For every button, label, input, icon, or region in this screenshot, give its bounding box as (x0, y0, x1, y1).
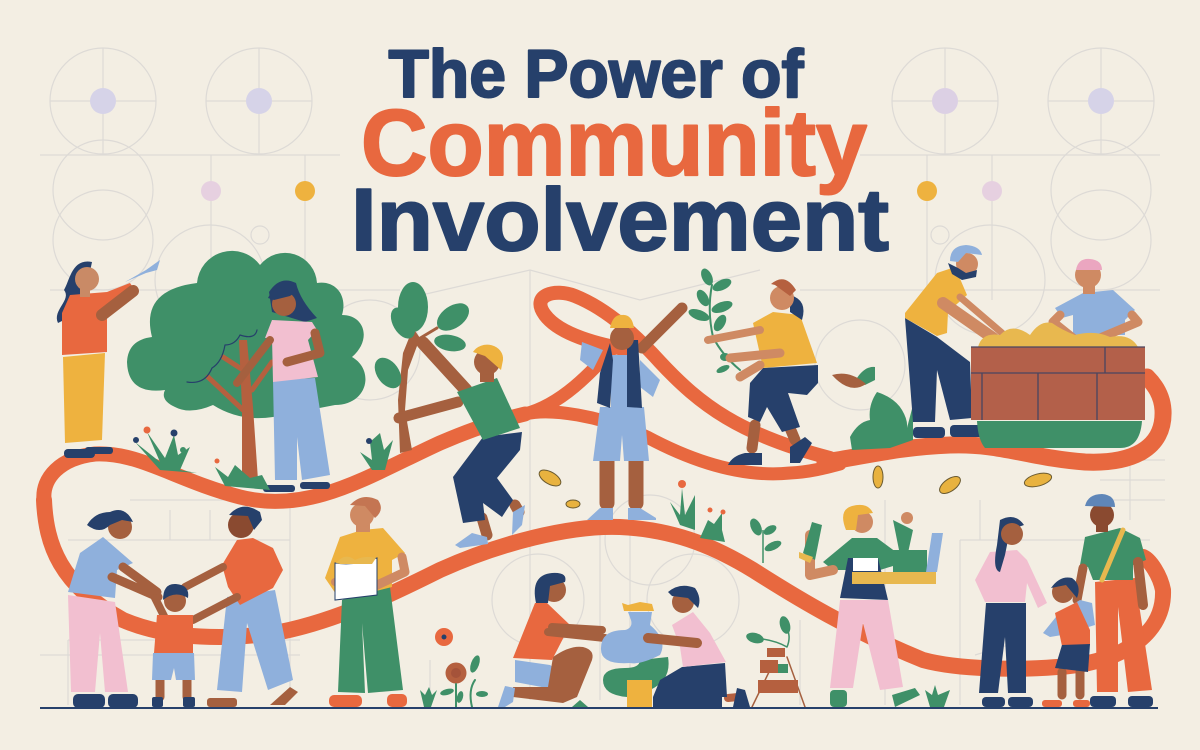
flowers and small plants (420, 628, 488, 707)
person: woman with brush on top left (57, 260, 160, 458)
winding orange ribbon (44, 293, 1163, 669)
person: woman in pink top (237, 280, 330, 492)
title (351, 36, 889, 269)
green bush (850, 392, 913, 450)
person: figure with paper (325, 497, 407, 707)
person: kneeling figure in orange (498, 573, 605, 707)
person: man in blue shirt (1053, 259, 1138, 338)
grass tuft (925, 685, 950, 707)
tree (127, 251, 365, 482)
title: The Power of (388, 36, 804, 112)
falling coins (537, 466, 1053, 508)
title: Involvement (351, 170, 889, 269)
person: man in green, family group (1077, 494, 1153, 707)
person: child, family group (1042, 577, 1095, 707)
person: vendor with tray (799, 505, 943, 707)
title: Community (361, 90, 867, 195)
sapling being planted (369, 282, 474, 453)
person: woman in orange top (185, 507, 298, 707)
decorative dots (90, 88, 1114, 201)
brick planter with coins (971, 322, 1145, 448)
person: seated woman holding plant (687, 267, 818, 465)
green plants middle (670, 480, 783, 563)
person: woman in pink, family group (975, 517, 1047, 707)
vase on pedestal (601, 602, 669, 707)
person: kneeling woman in pink (648, 586, 750, 707)
person: man with yellow helmet (399, 343, 525, 548)
person: centre figure with raised arms (580, 308, 682, 520)
plant on ladder stand (745, 615, 805, 707)
person: woman in blue top (68, 510, 158, 708)
person: man with blue cap (905, 245, 1002, 438)
seed pod and leaf (832, 367, 875, 388)
person: child in orange (152, 584, 237, 707)
ground line (40, 707, 1158, 709)
small plants upper left (133, 426, 393, 490)
